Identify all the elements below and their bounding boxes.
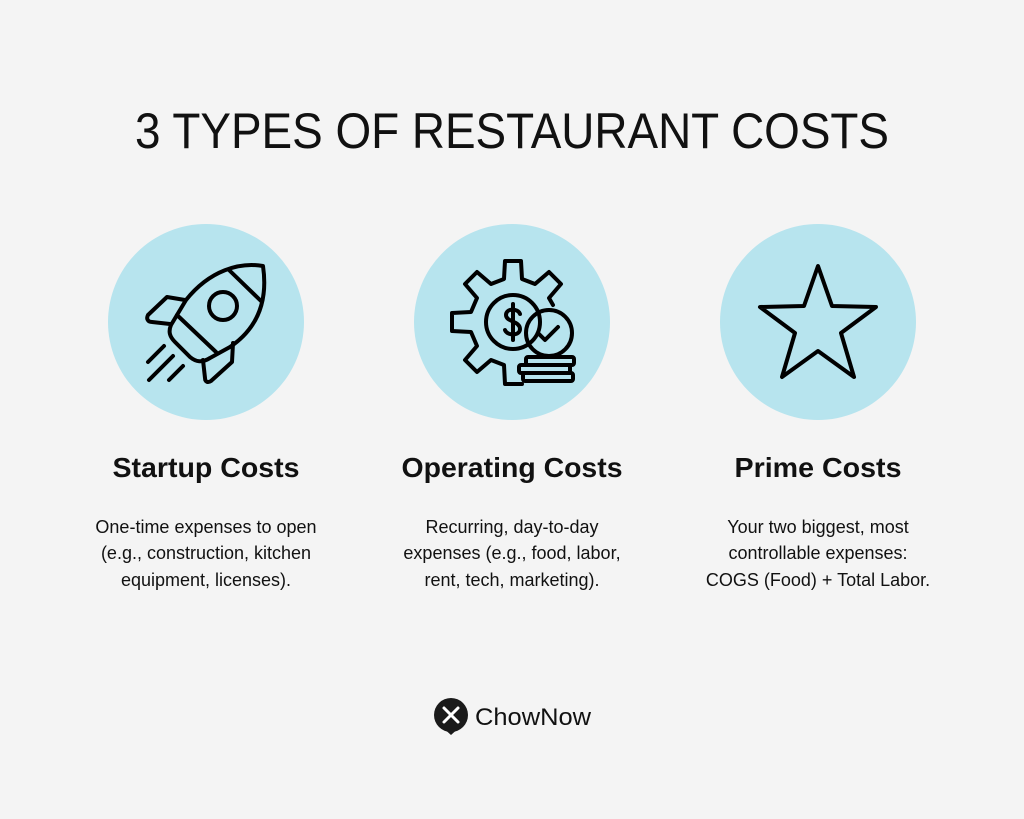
text: prime description: [706, 517, 930, 590]
text: startup description: (e.g., construction, kitchen: [101, 543, 311, 563]
text: prime description: controllable expenses:: [728, 543, 908, 563]
text: prime description: COGS (Food) + Total Labor.: [706, 570, 930, 590]
title: 3 TYPES OF RESTAURANT COSTS: [135, 103, 889, 159]
text: startup description: [95, 517, 317, 590]
panel: prime costs: [706, 224, 930, 590]
text: operating description: Recurring, day-to-day: [425, 517, 599, 537]
text: operating description: expenses (e.g., food, labor,: [403, 543, 621, 563]
text: prime description: Your two biggest, most: [727, 517, 909, 537]
text: operating description: rent, tech, marketing).: [424, 570, 600, 590]
panel: startup costs: [95, 224, 317, 590]
heading: prime costs: Prime Costs: [734, 452, 902, 483]
text: startup description: One-time expenses to open: [95, 517, 317, 537]
text: startup description: equipment, licenses).: [121, 570, 291, 590]
heading: startup costs: Startup Costs: [112, 452, 300, 483]
icon: gear with coins: [414, 224, 610, 420]
text: operating description: [403, 517, 621, 590]
icon: logo mark: [434, 698, 468, 735]
icon: star: [720, 224, 916, 420]
heading: operating costs: Operating Costs: [402, 452, 622, 483]
logo: ChowNow: ChowNow: [475, 704, 592, 731]
logo: ChowNow: [434, 698, 592, 735]
panel: operating costs: [402, 224, 622, 590]
icon: rocket: [108, 224, 304, 420]
